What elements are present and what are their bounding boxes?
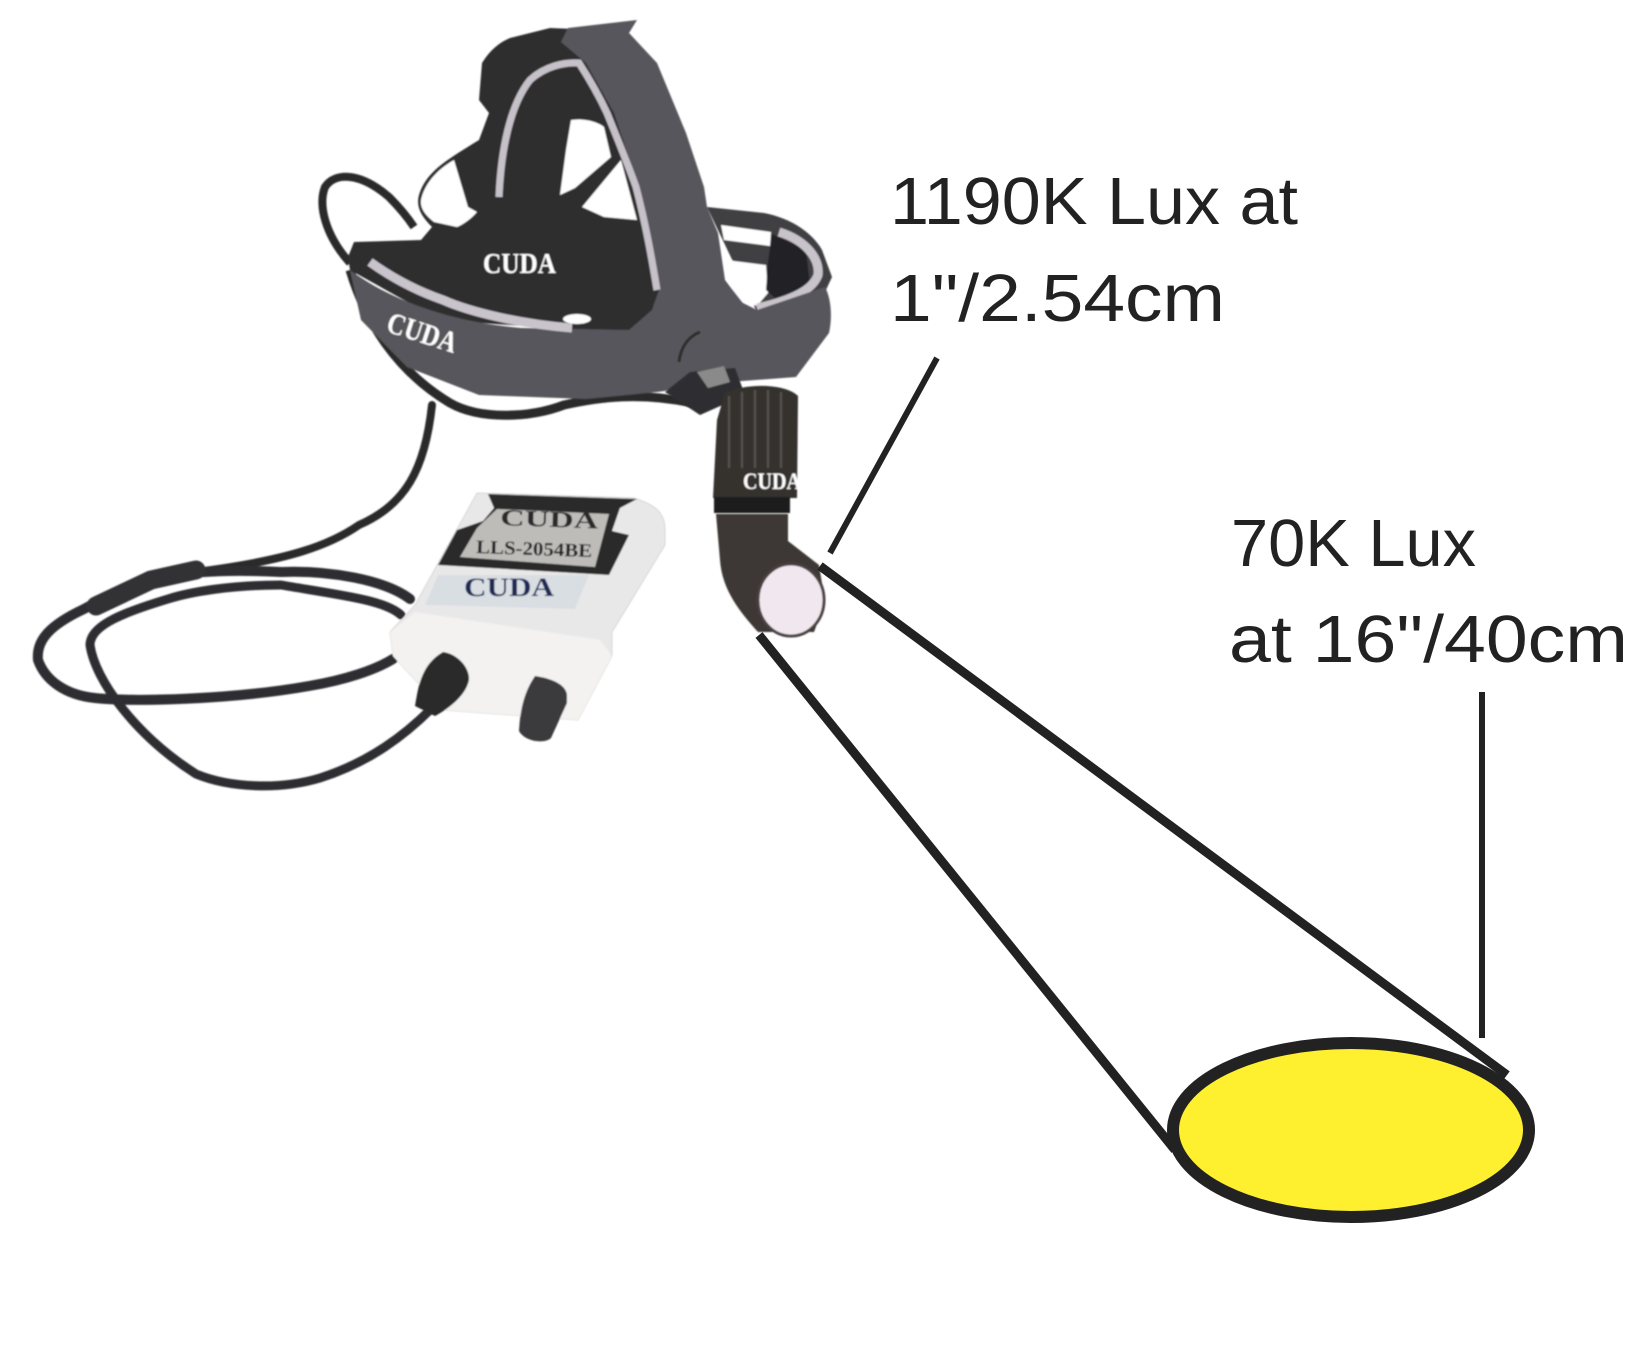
plug left bbox=[415, 652, 469, 716]
battery label slot bbox=[438, 494, 637, 575]
lower arm wire bbox=[350, 270, 693, 415]
label: far illuminance bbox=[1229, 506, 1628, 677]
grey strap and band bbox=[350, 20, 831, 399]
label: far illuminance: 70K Lux bbox=[1231, 506, 1476, 581]
cable loop bbox=[322, 177, 414, 263]
lamp elbow bbox=[716, 514, 825, 632]
label: near illuminance: 1"/2.54cm bbox=[890, 261, 1225, 336]
ring slit bbox=[721, 225, 771, 246]
label: near illuminance: 1190K Lux at bbox=[890, 164, 1298, 239]
plug right bbox=[519, 676, 567, 741]
lamp logo: CUDA bbox=[743, 469, 801, 494]
small hole bbox=[563, 314, 591, 324]
cradle hole mid bbox=[560, 119, 611, 195]
logo rear: CUDA bbox=[483, 248, 556, 280]
icon: headband bbox=[322, 20, 832, 415]
beam lower edge bbox=[759, 635, 1175, 1150]
beam upper edge bbox=[820, 566, 1507, 1075]
logo front: CUDA bbox=[383, 306, 462, 360]
lamp ring bbox=[714, 497, 790, 513]
label: near illuminance bbox=[890, 164, 1298, 336]
battery logo 2: CUDA bbox=[464, 573, 554, 602]
battery logo: CUDA bbox=[500, 505, 599, 533]
swivel connector bbox=[665, 368, 745, 415]
strap pad bbox=[499, 63, 657, 290]
callout line: near bbox=[830, 358, 937, 553]
cylinder ribs bbox=[729, 390, 781, 468]
ring hole bbox=[726, 260, 768, 306]
icon: power cables bbox=[38, 405, 432, 786]
lamp lens bbox=[758, 564, 824, 636]
label: far illuminance: at 16"/40cm bbox=[1229, 602, 1628, 677]
light spot bbox=[1173, 1043, 1529, 1217]
dark cradle bbox=[348, 28, 690, 335]
blue logo panel bbox=[425, 575, 589, 609]
cradle hole right bbox=[582, 160, 637, 220]
ring pad bbox=[757, 232, 818, 308]
battery body bbox=[390, 493, 665, 720]
rear ring bbox=[707, 207, 832, 312]
ring dark patch bbox=[766, 234, 810, 298]
icon: lamp head bbox=[665, 366, 825, 636]
front pad bbox=[370, 262, 572, 328]
swivel silver bits bbox=[697, 366, 730, 388]
band slit bbox=[679, 332, 700, 362]
callout line: far bbox=[1479, 692, 1485, 1038]
lamp cylinder bbox=[713, 386, 798, 498]
battery silver label bbox=[460, 509, 609, 567]
icon: battery pack bbox=[390, 493, 665, 741]
battery model: LLS-2054BE bbox=[476, 537, 592, 562]
cradle hole left bbox=[421, 160, 477, 227]
